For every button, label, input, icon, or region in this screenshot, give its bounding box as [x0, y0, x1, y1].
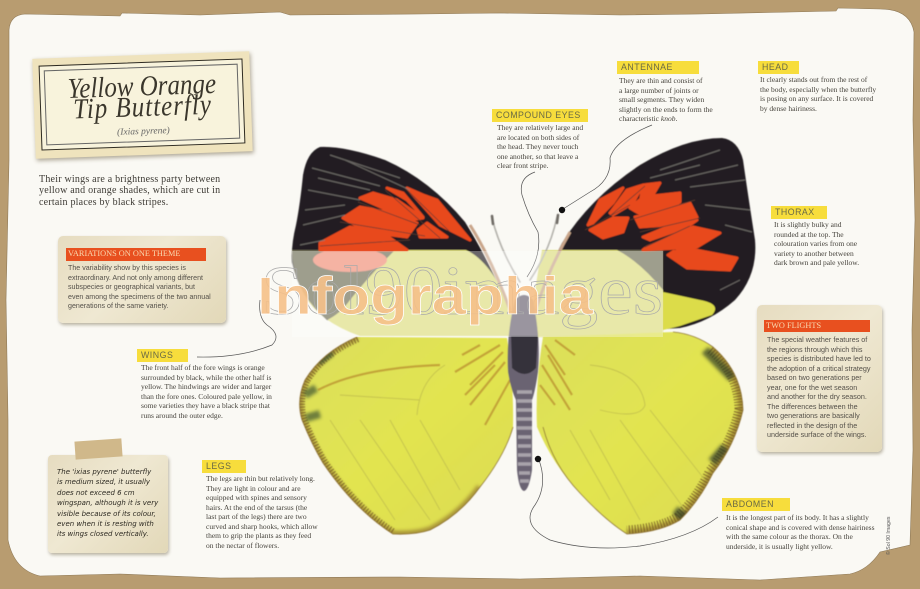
leader: antennae — [559, 125, 652, 213]
label: head: HEAD — [762, 62, 788, 72]
label: abdomen — [722, 498, 790, 511]
label: compound eyes: COMPOUND EYES — [496, 110, 581, 120]
leader lines and dots — [197, 125, 718, 548]
label: thorax — [771, 206, 827, 219]
label: legs — [202, 460, 246, 473]
watermark: Sol90images: Sol90images — [261, 253, 663, 330]
note card — [48, 455, 168, 553]
text: head: It clearly stands out from the rest of the body, especially when the butterfly is posing on any surface. It is covered by dense hairiness. — [760, 75, 876, 112]
label: wings — [137, 349, 188, 362]
panel: variations on one theme — [58, 236, 226, 323]
label: antennae: ANTENNAE — [621, 62, 673, 72]
left hindwing — [300, 337, 513, 534]
text: two flights: The special weather features of the regions through which this species is distributed have led to the adoption of a critical strategy based on two generations per year, one for the wet season and another for the dry season. The differences between the two generations are basically reflected in the design of the underside surface of the wings. — [767, 335, 871, 439]
label: abdomen: ABDOMEN — [726, 499, 774, 509]
title plate — [32, 51, 253, 159]
panel: two flights — [757, 305, 882, 452]
label: wings: WINGS — [141, 350, 173, 360]
label: head — [758, 61, 799, 74]
note text: The 'ixias pyrene' butterfly is medium sized, it usually does not exceed 6 cm wingspan, although it is very visible because of its colour, even when it is resting with its wings closed vertically. — [57, 468, 158, 538]
text: abdomen: It is the longest part of its body. It has a slightly conical shape and is covered with dense hairiness with the same colour as the thorax. On the underside, it is usually light yellow. — [726, 513, 874, 550]
text: legs: The legs are thin but relatively long. They are light in colour and are equipped with spines and sensory hairs. At the end of the tarsus (the last part of the legs) there are two curved and sharp hooks, which allow them to grip the plants as they feed on the nectar of flowers. — [206, 474, 318, 550]
credit: © Sol 90 Images — [885, 516, 892, 555]
text: antennae: They are thin and consist of a large number of joints or small segments. They widen slightly on the ends to form the characteristic knob. — [619, 76, 713, 123]
leader: abdomen — [530, 456, 718, 548]
title: Yellow Orange Tip Butterfly — [67, 69, 217, 125]
left forewing — [292, 147, 512, 336]
body: thorax and abdomen — [508, 295, 539, 491]
right hindwing — [537, 332, 743, 534]
heading: two flights — [764, 320, 870, 332]
text: compound eyes: They are relatively large and are located on both sides of the head. They never touch one another, so that leave a clear front stripe. — [497, 123, 583, 170]
label: thorax: THORAX — [775, 207, 815, 217]
heading: variations: VARIATIONS ON ONE THEME — [68, 249, 180, 258]
right forewing — [532, 138, 755, 337]
label: compound eyes — [492, 109, 588, 122]
tape — [74, 438, 123, 460]
heading: two flights: TWO FLIGHTS — [766, 321, 821, 330]
label: legs: LEGS — [206, 461, 231, 471]
text: wings: The front half of the fore wings is orange surrounded by black, while the other half is yellow. The hindwings are wider and larger than the fore ones. Coloured pale yellow, in some varieties they have a black stripe that runs around the outer edge. — [141, 363, 272, 420]
label: antennae — [617, 61, 699, 74]
watermark panel — [257, 251, 663, 337]
antennae — [492, 215, 558, 282]
watermark: Infographia: Infographia — [257, 267, 594, 326]
intro text: Their wings are a brightness party between yellow and orange shades, which are cut in certain places by black stripes. — [39, 174, 220, 208]
text: variations: The variability show by this species is extraordinary. And not only among different subspecies or geographical variants, but even among the specimens of the two annual generations of the same variety. — [68, 264, 211, 310]
scientific name: (Ixias pyrene) — [117, 126, 170, 138]
heading: variations — [66, 248, 206, 261]
leader: wings — [197, 300, 276, 357]
text: thorax: It is slightly bulky and rounded at the top. The colouration varies from one variety to another between dark brown and pale yellow. — [774, 220, 859, 267]
leader: compound eyes — [521, 172, 539, 277]
butterfly illustration — [292, 138, 755, 534]
